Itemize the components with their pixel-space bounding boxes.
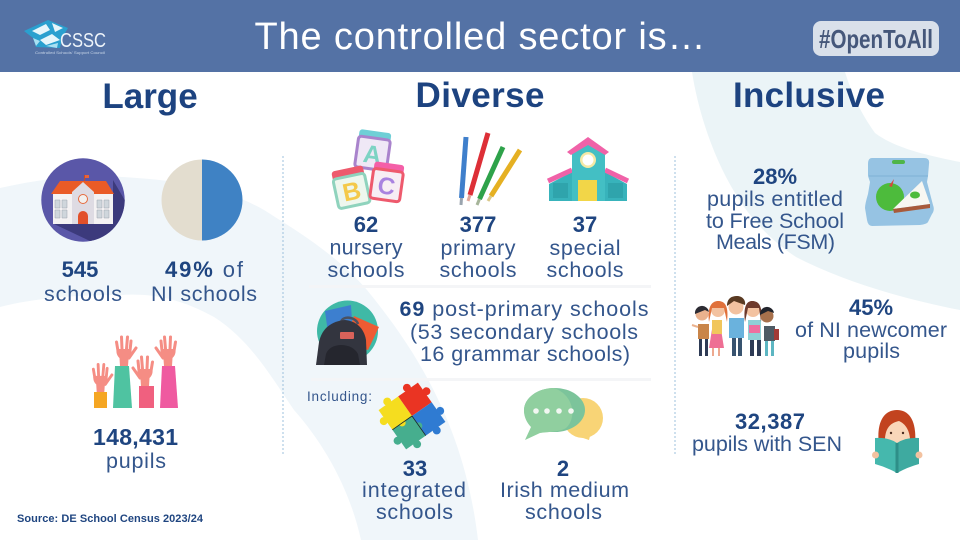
stat: 2 Irish medium schools: 2: [557, 456, 569, 481]
stat: 62 nursery schools: [328, 212, 404, 282]
stat: 148,431 pupils: 148,431: [93, 424, 178, 450]
icon: child reading a book: [872, 410, 922, 473]
source note: Source: DE School Census 2023/24: [17, 513, 204, 525]
stat: 148,431 pupils: pupils: [106, 449, 166, 473]
stat: 49% of NI schools: [151, 257, 257, 306]
stat: 545 schools: schools: [44, 282, 122, 306]
stat: 545 schools: [44, 257, 122, 306]
icon: coloured pencils: [461, 133, 520, 205]
stat: 148,431 pupils: [93, 424, 178, 473]
stat: 33 integrated schools: [362, 456, 466, 524]
stat: 545 schools: 545: [62, 257, 98, 282]
stat: 377 primary schools: primary: [440, 236, 516, 260]
chart: 49% pie: [162, 160, 242, 240]
stat: 32,387 pupils with SEN: [692, 409, 842, 456]
icon: alphabet blocks: A: [361, 140, 383, 170]
text: post-primary schools: 16 grammar schools): [420, 342, 630, 366]
stat: 37 special schools: 37: [573, 212, 597, 237]
logo: CSSC: [24, 20, 106, 55]
label: Including: Including:: [307, 389, 372, 404]
text: post-primary schools: [400, 297, 648, 366]
stat: 45% NI newcomer pupils: of NI newcomer: [795, 318, 947, 342]
icon: school building: [41, 158, 125, 242]
heading: Inclusive: Inclusive: [733, 76, 885, 115]
stat: 28% free school meals: [706, 164, 844, 254]
stat: 2 Irish medium schools: Irish medium: [500, 478, 629, 502]
icon: school house: [548, 137, 628, 201]
stat: 377 primary schools: schools: [440, 258, 516, 282]
stat: 33 integrated schools: integrated: [362, 478, 466, 502]
stat: 28% free school meals: to Free School: [706, 209, 844, 233]
stat: 377 primary schools: 377: [460, 212, 496, 237]
title: The controlled sector is…: [254, 16, 706, 58]
icon: jigsaw puzzle: [370, 374, 454, 458]
text: post-primary schools: 69 post-primary schools: [400, 297, 648, 321]
stat: 32,387 pupils with SEN: pupils with SEN: [692, 432, 842, 456]
stat: 2 Irish medium schools: schools: [525, 500, 602, 524]
heading: Large: Large: [102, 77, 198, 116]
stat: 37 special schools: [546, 212, 624, 282]
logo: CSSC: CSSC: [60, 30, 106, 52]
stat: 32,387 pupils with SEN: 32,387: [735, 409, 805, 434]
stat: 37 special schools: special: [550, 236, 620, 260]
icon: alphabet blocks: C: [376, 172, 397, 201]
badge: #OpenToAll: #OpenToAll: [819, 24, 933, 54]
icon: lunch box: [865, 158, 934, 226]
stat: 37 special schools: schools: [546, 258, 624, 282]
stat: 62 nursery schools: 62: [354, 212, 378, 237]
text: post-primary schools: (53 secondary schools: [410, 320, 638, 344]
stat: 45% NI newcomer pupils: pupils: [843, 339, 900, 363]
icon: alphabet blocks: B: [340, 176, 364, 207]
stat: 377 primary schools: [440, 212, 516, 282]
icon: speech bubbles: [524, 388, 603, 440]
stat: 33 integrated schools: schools: [376, 500, 453, 524]
stat: 62 nursery schools: nursery: [330, 236, 403, 260]
logo: CSSC: Controlled Schools' Support Council: [35, 50, 105, 55]
stat: 28% free school meals: Meals (FSM): [716, 230, 835, 254]
stat: 28% free school meals: 28%: [753, 164, 797, 189]
heading: Diverse: Diverse: [416, 76, 544, 115]
icon: raised hands: [93, 337, 178, 408]
stat: 45% NI newcomer pupils: [795, 295, 947, 363]
icon: group of pupils: [692, 296, 779, 356]
stat: 62 nursery schools: schools: [328, 258, 404, 282]
stat: 49% of NI schools: NI schools: [151, 282, 257, 306]
icon: school backpack: [316, 300, 379, 365]
stat: 45% NI newcomer pupils: 45%: [849, 295, 893, 320]
stat: 2 Irish medium schools: [500, 456, 629, 524]
stat: 33 integrated schools: 33: [403, 456, 427, 481]
stat: 49% of NI schools: 49% of: [165, 257, 244, 282]
stat: 28% free school meals: pupils entitled: [707, 187, 843, 211]
icon: alphabet blocks: [331, 129, 404, 209]
